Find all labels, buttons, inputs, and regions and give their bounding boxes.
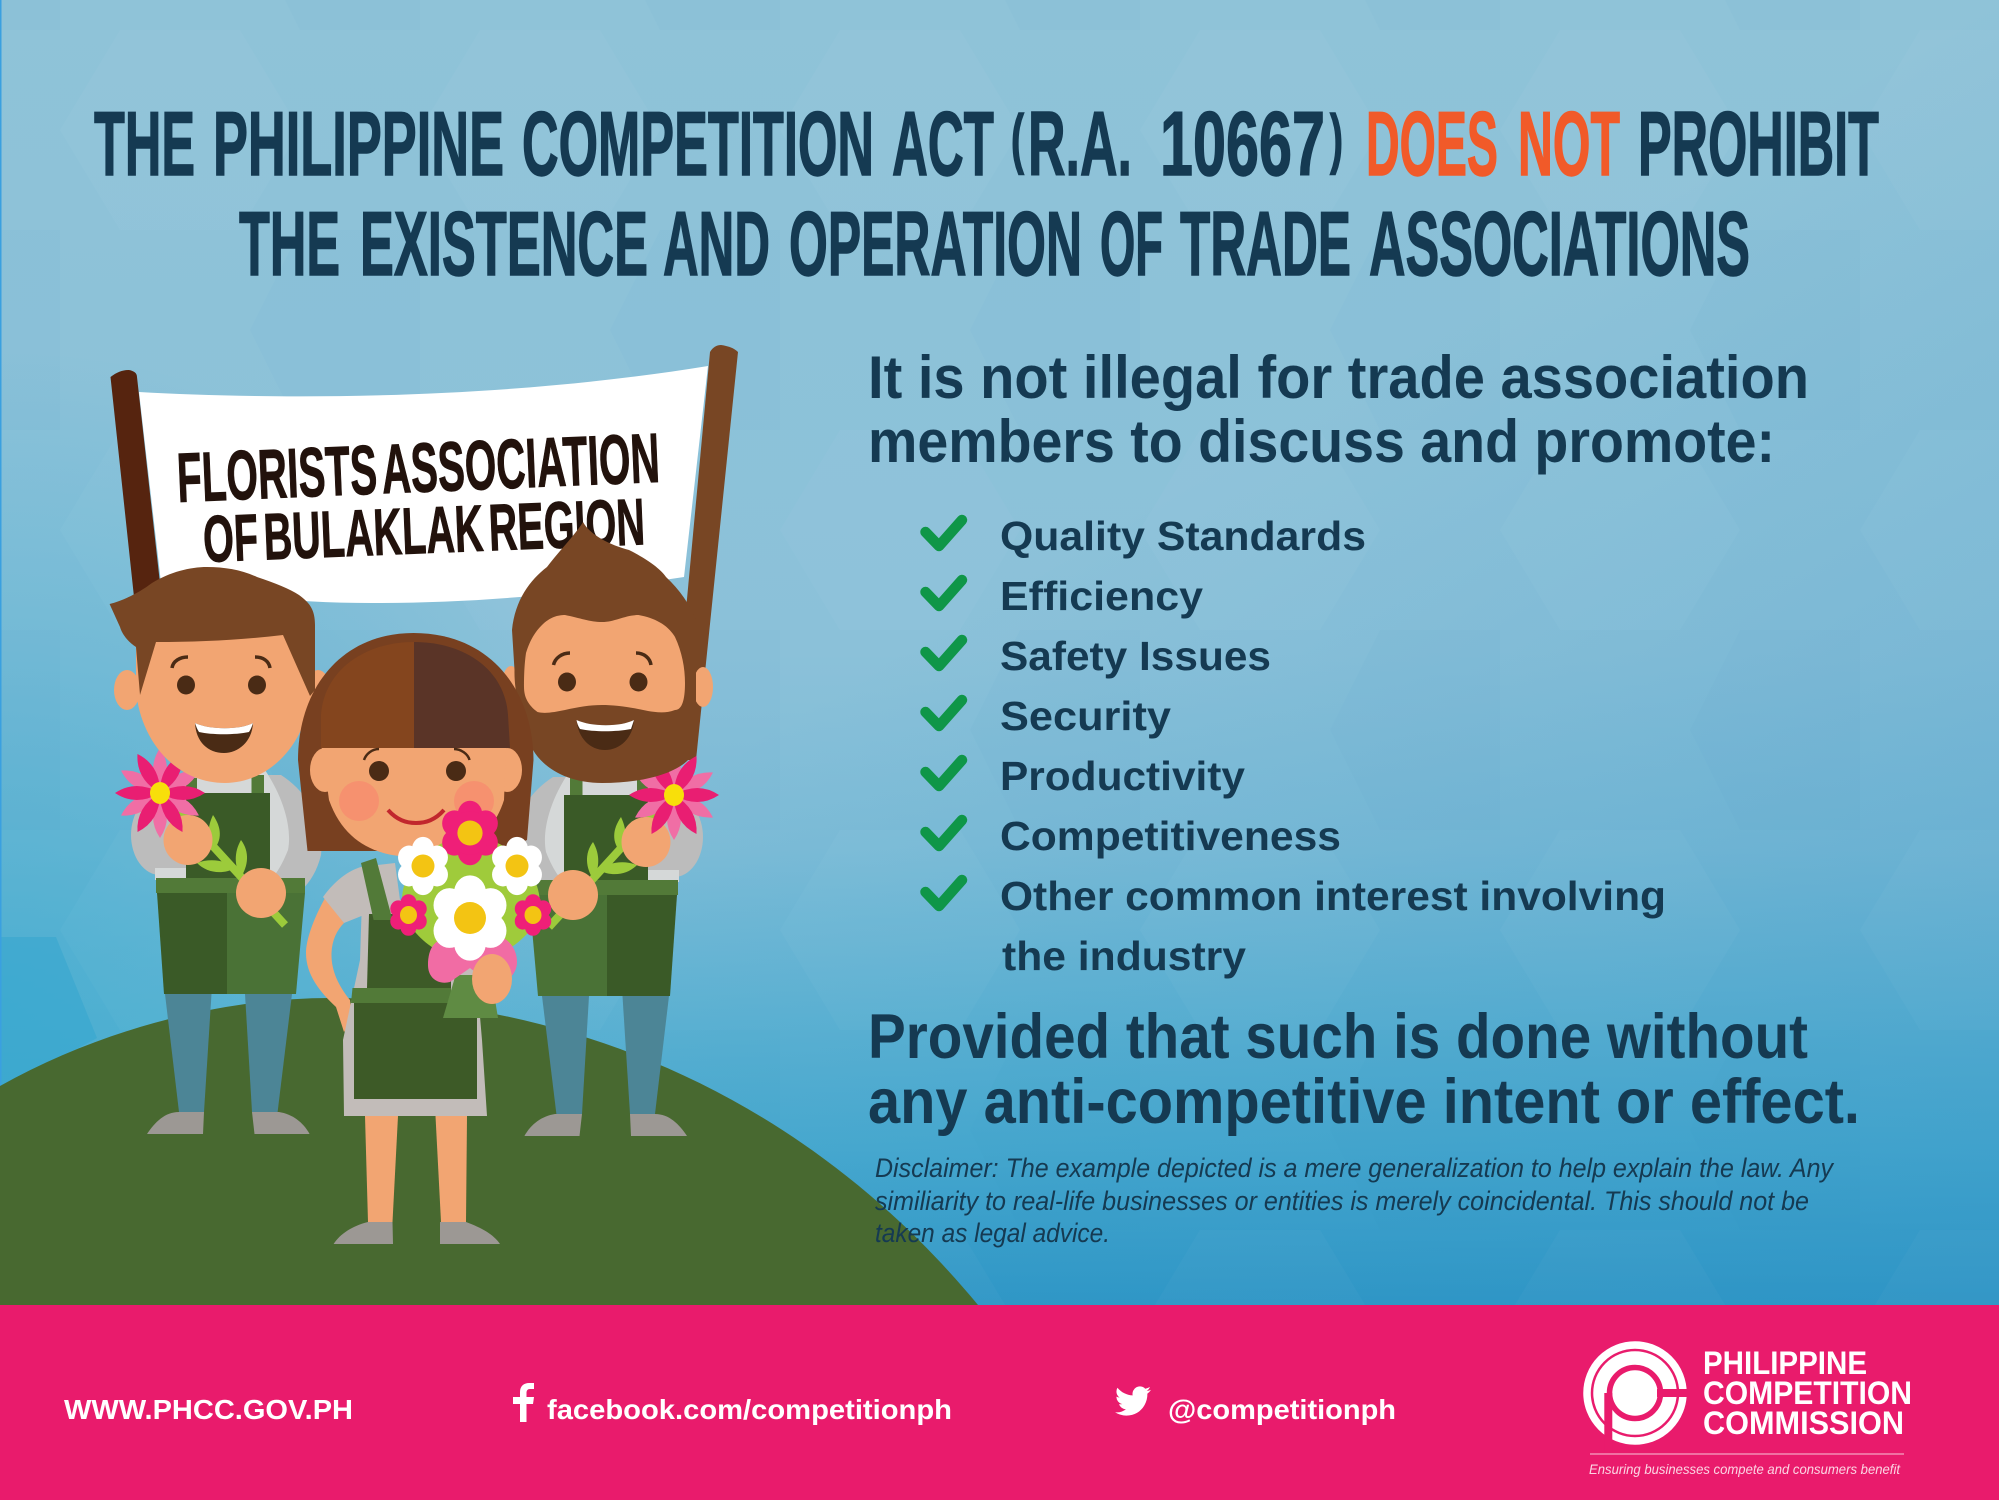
logo tagline: Ensuring businesses compete and consumers benefit [1589, 1461, 1901, 1477]
bouquet [390, 801, 551, 1018]
florist: left man [110, 567, 330, 1134]
disclaimer: similiarity to real-life businesses or entities is merely coincidental. This should not be [875, 1186, 1809, 1216]
title line 2: EXISTENCE [360, 194, 648, 295]
list items [1000, 513, 1666, 979]
list items: the industry [1002, 933, 1246, 979]
girl legs and shoes [334, 1116, 500, 1244]
twitter handle: @competitionph [1168, 1394, 1396, 1425]
title line 1 [94, 94, 1879, 195]
title line 1: ACT [892, 94, 994, 195]
title line 1: 10667 [1160, 94, 1325, 195]
title line 2 [239, 194, 1750, 295]
logo wordmark: COMMISSION [1703, 1405, 1904, 1441]
title line 1: THE [94, 94, 195, 195]
list items: Safety Issues [1000, 633, 1271, 679]
logo wordmark: COMPETITION [1703, 1375, 1912, 1411]
icon: twitter [1115, 1386, 1151, 1416]
list items: Security [1000, 693, 1171, 739]
title [94, 94, 1879, 295]
title line 1: COMPETITION [522, 94, 874, 195]
facebook handle: facebook.com/competitionph [547, 1394, 952, 1425]
title line 1: NOT [1518, 94, 1620, 195]
disclaimer: Disclaimer: The example depicted is a mere generalization to help explain the law. Any [875, 1153, 1834, 1183]
proviso statement: any anti-competitive intent or effect. [868, 1067, 1860, 1137]
checklist [926, 513, 1666, 979]
title line 1: PHILIPPINE [213, 94, 504, 195]
hill [0, 998, 978, 1305]
logo mark [1587, 1345, 1693, 1455]
banner text [175, 419, 661, 576]
title line 2: TRADE [1180, 194, 1351, 295]
girl bangs [321, 642, 510, 748]
title line 1: ( [1011, 101, 1024, 175]
title line 2: AND [663, 194, 770, 295]
disclaimer [875, 1153, 1834, 1248]
title line 2: THE [239, 194, 340, 295]
title line 2: OF [1100, 194, 1163, 295]
girl hair [298, 633, 534, 851]
heading: not illegal: members to discuss and promote: [868, 408, 1775, 475]
icon: facebook [513, 1383, 534, 1422]
banner text: FLORISTS ASSOCIATION [175, 419, 661, 517]
logo: Philippine Competition Commission [1587, 1345, 1912, 1477]
list items: Quality Standards [1000, 513, 1366, 559]
banner poles [110, 345, 738, 760]
girl arm and dress [306, 858, 487, 1116]
logo wordmark: PHILIPPINE [1703, 1345, 1867, 1381]
title line 1: DOES [1366, 94, 1498, 195]
heading: not illegal [868, 344, 1809, 475]
list items: Productivity [1000, 753, 1245, 799]
logo wordmark [1703, 1345, 1912, 1441]
website: WWW.PHCC.GOV.PH [64, 1394, 353, 1425]
title line 1: R.A. [1028, 94, 1132, 195]
florist: girl with bouquet [298, 633, 551, 1244]
footer band [0, 1305, 1999, 1500]
florist: right man with beard [503, 522, 719, 1136]
banner [139, 366, 708, 603]
title line 1: ) [1330, 101, 1343, 175]
list items: Other common interest involving [1000, 873, 1666, 919]
title line 2: OPERATION [789, 194, 1082, 295]
list items: Competitiveness [1000, 813, 1341, 859]
proviso statement [868, 1002, 1860, 1137]
illustration: florists with banner [110, 345, 738, 1244]
list items: Efficiency [1000, 573, 1203, 619]
disclaimer: taken as legal advice. [875, 1218, 1110, 1248]
banner text: OF BULAKLAK REGION [202, 484, 646, 576]
check icons [926, 520, 962, 906]
girl head [310, 748, 522, 857]
proviso statement: Provided that such is done without [868, 1002, 1808, 1072]
heading: not illegal: It is not illegal for trade association [868, 344, 1809, 411]
